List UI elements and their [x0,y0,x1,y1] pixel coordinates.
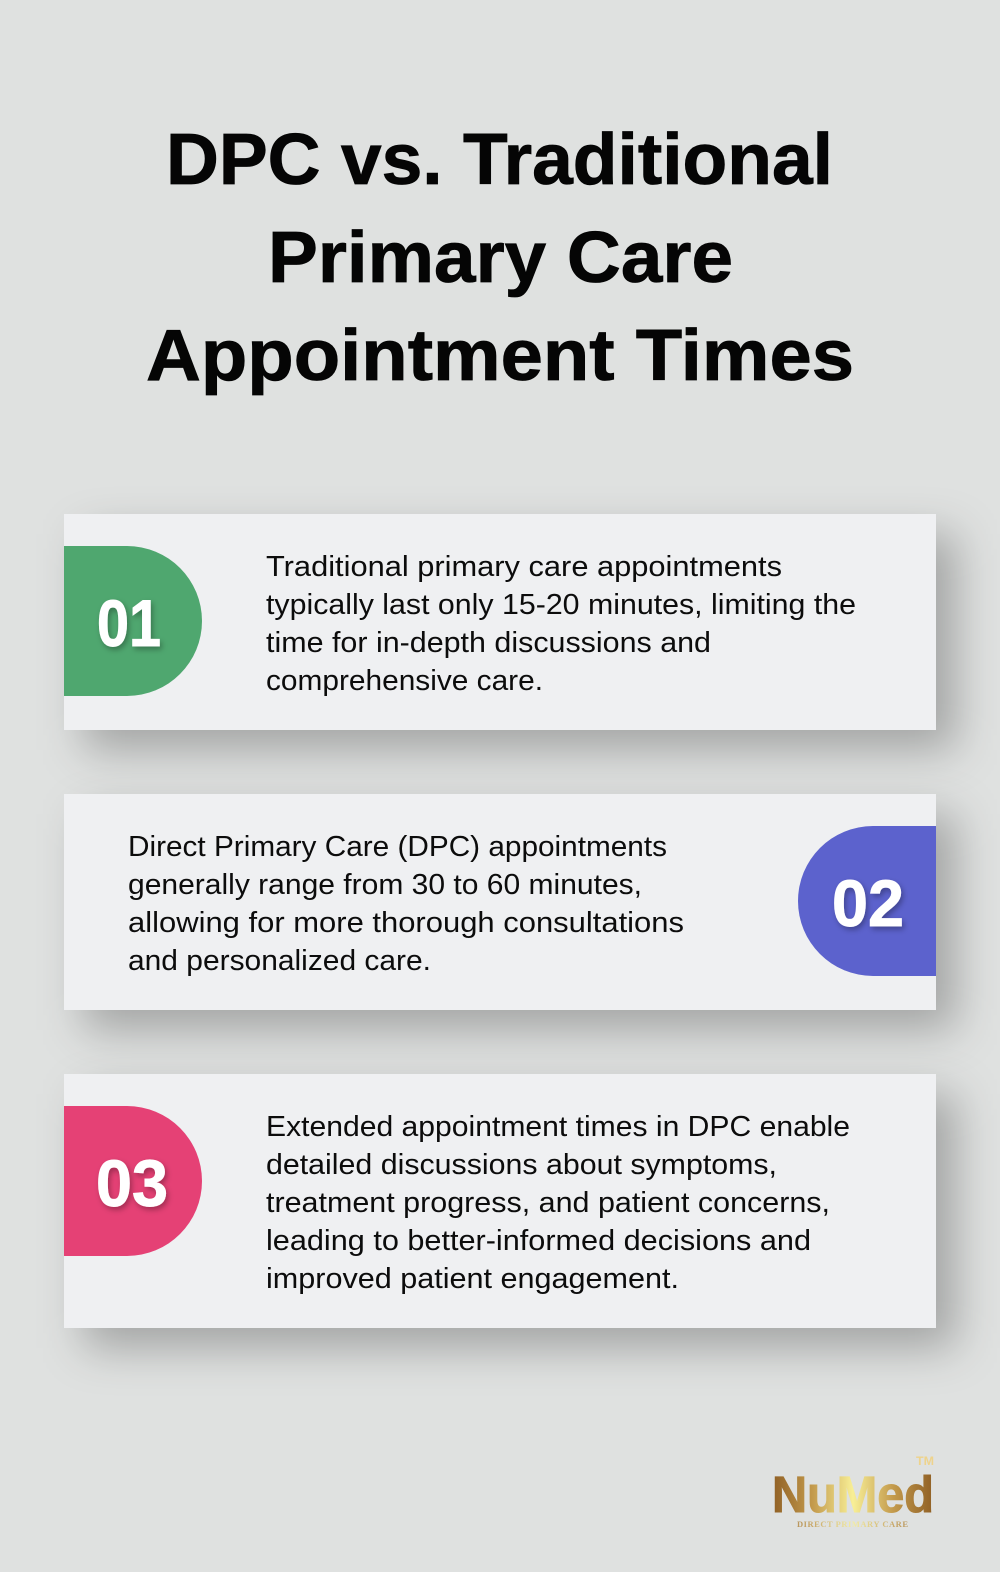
text block: card 1: time for in-depth discussions and [266,627,711,659]
logo: NuMed: TM [916,1454,934,1468]
badge: 03 [64,1106,202,1256]
text block: card 2: and personalized care. [128,945,431,977]
text block: card 3: leading to better-informed decisions and [266,1225,811,1257]
badge: 01 [64,546,202,696]
text block: card 3 [266,1111,850,1295]
text block: card 2: allowing for more thorough consultations [128,907,684,939]
panel: card 1 traditional appointments [64,514,936,730]
badge: 02 [798,826,936,976]
title [146,120,854,396]
text block: card 3: Extended appointment times in DPC enable [266,1111,850,1143]
title: Primary Care [268,218,733,298]
panel: card 3 shadow [84,1094,956,1348]
text block: card 3: treatment progress, and patient concerns, [266,1187,830,1219]
text block: card 1: Traditional primary care appointments [266,551,782,583]
panel: card 3 extended times [64,1074,936,1328]
text block: card 1: typically last only 15-20 minutes, limiting the [266,589,856,621]
panel: card 2 shadow [84,814,956,1030]
badge: 02: 02 [832,866,904,940]
text block: card 2: Direct Primary Care (DPC) appointments [128,831,667,863]
text block: card 2 [128,831,684,977]
text block: card 2: generally range from 30 to 60 minutes, [128,869,642,901]
text block: card 3: detailed discussions about symptoms, [266,1149,777,1181]
logo: NuMed: NuMed [772,1466,934,1523]
text block: card 3: improved patient engagement. [266,1263,679,1295]
text block: card 1 [266,551,856,697]
panel: card 1 shadow [84,534,956,750]
badge: 03: 03 [96,1146,168,1220]
badge: 01: 01 [97,586,161,660]
title: Appointment Times [146,316,854,396]
logo: NuMed: DIRECT PRIMARY CARE [797,1519,908,1529]
panel: card 2 DPC appointments [64,794,936,1010]
text block: card 1: comprehensive care. [266,665,543,697]
title: DPC vs. Traditional [166,120,833,200]
